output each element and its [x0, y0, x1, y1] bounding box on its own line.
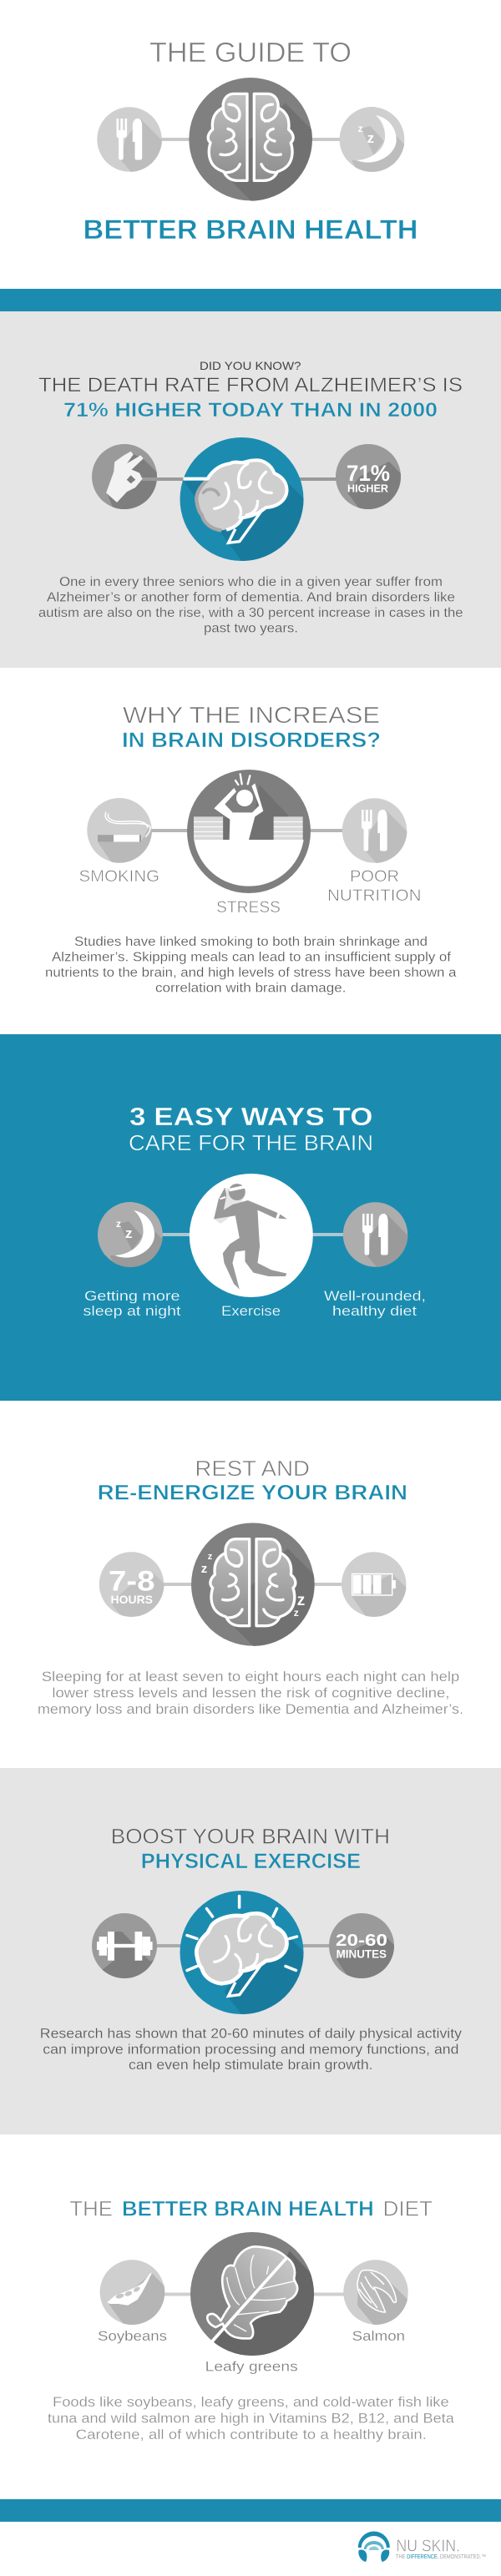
body text: sleep benefits: memory loss and brain disorders like Dementia and Alzheimer’s.: [38, 1702, 463, 1717]
icon: glowing brain on teal circle: [180, 1891, 307, 2017]
label: healthy diet: healthy diet: [332, 1304, 417, 1319]
connector lines: [146, 829, 347, 832]
body text: causes: correlation with brain damage.: [155, 982, 346, 995]
stat: 7-8 hours: HOURS: [110, 1594, 153, 1606]
stat: 20-60 minutes: 20-60: [336, 1932, 387, 1950]
panel: did you know: [0, 311, 501, 668]
body text: seniors statistic: autism are also on the rise, with a 30 percent increase in cases in the: [38, 606, 463, 620]
icon: sleeping brain: z: [297, 1592, 305, 1609]
title: the guide to: THE GUIDE TO: [149, 38, 352, 68]
divider band: teal bottom: [0, 2499, 501, 2522]
label: getting more sleep: Getting more: [84, 1289, 180, 1304]
logo: nu skin: [358, 2531, 486, 2562]
panel: three easy ways: [0, 1034, 501, 1401]
body text: causes: Studies have linked smoking to both brain shrinkage and: [74, 935, 428, 949]
eyebrow: did you know: DID YOU KNOW?: [200, 359, 301, 372]
label: getting more sleep: sleep at night: [84, 1304, 181, 1319]
label: getting more sleep: [84, 1289, 181, 1319]
wordmark: nu skin: NU SKIN.: [396, 2537, 460, 2556]
icon: moon and sleep: z: [358, 123, 363, 134]
heading: boost your brain with: BOOST YOUR BRAIN WITH: [111, 1826, 390, 1849]
body text: seniors statistic: Alzheimer’s or another form of dementia. And brain disorders like: [47, 591, 455, 604]
icon: cigarette: [87, 798, 152, 863]
icon: sleeping brain: z: [208, 1552, 213, 1562]
connector lines: [146, 1944, 338, 1947]
body text: causes: [45, 935, 457, 995]
heading: the better brain health diet: [69, 2197, 433, 2220]
icon: sleeping brain: z: [294, 1607, 299, 1619]
label: poor nutrition: POOR: [350, 868, 399, 886]
icon: moon and sleep: [339, 107, 404, 172]
body text: sleep benefits: [38, 1669, 463, 1717]
label: leafy greens: Leafy greens: [205, 2359, 298, 2374]
connector lines: [159, 1583, 347, 1586]
body text: causes: nutrients to the brain, and high levels of stress have been shown a: [45, 966, 457, 980]
icon: sleeping brain: [191, 1523, 318, 1649]
heading: death rate: THE DEATH RATE FROM ALZHEIMER’S IS: [38, 374, 463, 397]
icon: stressed person in ring: [187, 770, 311, 893]
title: better brain health: BETTER BRAIN HEALTH: [84, 215, 418, 245]
body text: exercise benefits: can even help stimulate brain growth.: [129, 2058, 373, 2073]
body text: exercise benefits: Research has shown that 20-60 minutes of daily physical activity: [40, 2027, 463, 2042]
heading: the better brain health diet: THE: [69, 2197, 113, 2220]
label: salmon: Salmon: [352, 2328, 405, 2344]
icon: leafy green: [190, 2232, 316, 2359]
connector lines: [159, 1233, 347, 1236]
icon: soybean pod: [100, 2260, 165, 2325]
tagline: the difference demonstrated: THE DIFFERENCE. DEMONSTRATED.™: [396, 2554, 486, 2560]
heading: 71 percent higher: 71% HIGHER TODAY THAN IN 2000: [63, 399, 438, 422]
label: soybeans: Soybeans: [98, 2328, 167, 2344]
connector lines: [142, 477, 342, 481]
panel: title header: [85, 43, 416, 239]
connector lines: [159, 2292, 347, 2296]
heading: the better brain health diet: BETTER BRAIN HEALTH: [122, 2197, 374, 2220]
label: poor nutrition: NUTRITION: [327, 887, 421, 905]
body text: foods: tuna and wild salmon are high in Vitamins B2, B12, and Beta: [48, 2412, 455, 2427]
label: poor nutrition: [327, 868, 421, 905]
heading: rest and: REST AND: [195, 1456, 310, 1481]
heading: physical exercise: PHYSICAL EXERCISE: [141, 1850, 361, 1873]
label: healthy diet: Well-rounded,: [324, 1289, 426, 1304]
stat: 20-60 minutes: [329, 1913, 394, 1978]
icon: brain top view: [189, 78, 316, 205]
body text: foods: [48, 2395, 455, 2442]
body text: seniors statistic: One in every three seniors who die in a given year suffer from: [59, 575, 443, 589]
icon: side brain on teal circle: [180, 437, 307, 563]
stat: 7-8 hours: 7-8: [109, 1566, 155, 1598]
icon: fork and knife: [342, 798, 407, 863]
body text: seniors statistic: past two years.: [204, 621, 298, 636]
stat: 71 percent higher: HIGHER: [347, 482, 388, 494]
connector lines: [159, 138, 347, 141]
icon: moon and sleep: z: [367, 130, 374, 146]
icon: dumbbell: [92, 1913, 157, 1978]
icon: nu skin mark: [358, 2531, 390, 2562]
heading: care for the brain: CARE FOR THE BRAIN: [129, 1130, 373, 1155]
icon: moon and sleep: z: [116, 1218, 121, 1230]
stat: 20-60 minutes: MINUTES: [337, 1947, 387, 1961]
stat: 71 percent higher: 71%: [347, 461, 390, 486]
heading: why the increase: WHY THE INCREASE: [123, 702, 380, 728]
icon: exercising person: [190, 1174, 313, 1299]
body text: sleep benefits: Sleeping for at least seven to eight hours each night can help: [42, 1669, 459, 1685]
label: smoking: SMOKING: [78, 868, 159, 886]
icon: radiating ticks: [187, 1897, 297, 1970]
heading: 3 easy ways to: 3 EASY WAYS TO: [129, 1102, 372, 1131]
label: healthy diet: [324, 1289, 426, 1319]
body text: seniors statistic: [38, 575, 463, 636]
heading: the better brain health diet: DIET: [382, 2197, 433, 2220]
body text: foods: Foods like soybeans, leafy greens, and cold-water fish like: [53, 2395, 449, 2410]
icon: hand okay sign: [92, 444, 157, 509]
stat: 71 percent higher: [336, 444, 401, 509]
stat: 7-8 hours: [99, 1552, 164, 1617]
icon: moon and sleep: z: [125, 1225, 132, 1241]
icon: battery: [342, 1552, 406, 1617]
panel: boost with exercise: [0, 1768, 501, 2134]
label: stress: STRESS: [216, 899, 281, 917]
heading: in brain disorders: IN BRAIN DISORDERS?: [122, 729, 381, 752]
icon: fork and knife: [342, 1202, 407, 1267]
icon: salmon steak: [343, 2260, 408, 2325]
body text: sleep benefits: lower stress levels and lessen the risk of cognitive decline,: [52, 1686, 449, 1701]
icon: sleeping brain: z: [201, 1562, 207, 1576]
label: exercise: Exercise: [221, 1304, 281, 1319]
body text: foods: Carotene, all of which contribute to a healthy brain.: [76, 2427, 427, 2442]
panel: better brain health diet: [48, 2201, 454, 2442]
icon: fork and knife: [97, 107, 162, 172]
panel: why the increase: [46, 707, 456, 995]
icon: moon and sleep: [98, 1202, 163, 1267]
body text: causes: Alzheimer’s. Skipping meals can lead to an insufficient supply of: [52, 950, 452, 965]
panel: rest and re-energize: [38, 1461, 463, 1716]
body text: exercise benefits: [40, 2027, 463, 2073]
heading: re-energize your brain: RE-ENERGIZE YOUR BRAIN: [98, 1482, 407, 1505]
divider band: teal top: [0, 289, 501, 311]
body text: exercise benefits: can improve information processing and memory functions, and: [43, 2042, 459, 2057]
